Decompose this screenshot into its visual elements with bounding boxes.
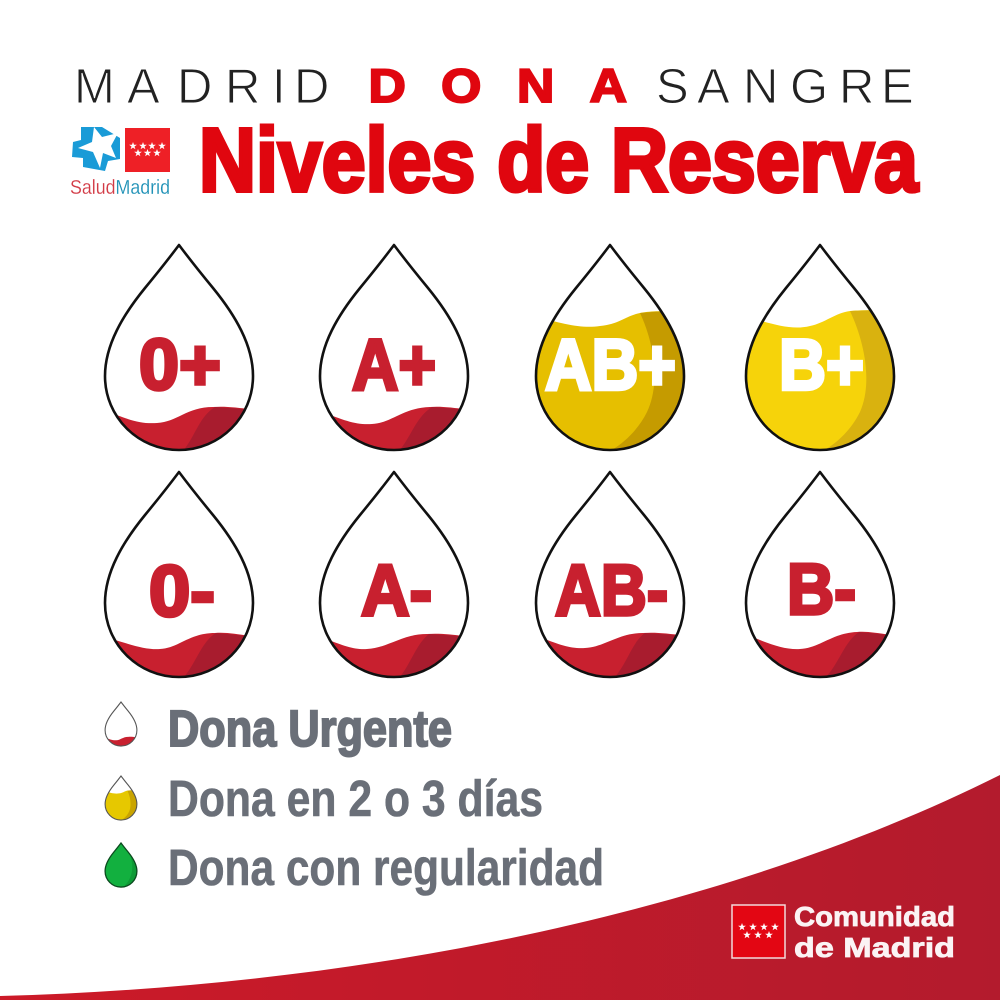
legend label: Dona con regularidad: Dona con regularidad: [168, 839, 604, 896]
drop: A- urgent: A-: [361, 551, 432, 631]
title: Madrid Dona Sangre: MADRID: [74, 60, 329, 114]
red swoosh footer: [0, 775, 1000, 1000]
drop: O- urgent: 0-: [149, 552, 215, 632]
icon: red flag with stars: [125, 128, 170, 172]
logo: Comunidad de Madrid: [732, 901, 955, 963]
icon: flag with seven stars: [732, 905, 785, 958]
drop: AB- urgent: AB-: [555, 551, 668, 631]
icon: blue cross with star: [72, 127, 120, 171]
title: Madrid Dona Sangre: SANGRE: [656, 60, 914, 114]
drop: O+ urgent: [99, 245, 259, 455]
drop: AB- urgent: [530, 472, 690, 682]
wordmark: de Madrid: [794, 932, 955, 963]
title: Madrid Dona Sangre: [74, 60, 914, 114]
logo wordmark: SaludMadrid: [70, 177, 170, 199]
legend icon: red drop: [104, 702, 138, 747]
legend label: Dona en 2 o 3 dias: Dona en 2 o 3 días: [168, 770, 543, 827]
drop: AB+ medium: [530, 245, 690, 455]
legend icon: yellow drop: [104, 776, 138, 821]
wordmark: Comunidad: [794, 901, 955, 932]
legend label: Dona Urgente: Dona Urgente: [168, 700, 452, 757]
wordmark: [794, 901, 955, 963]
drop: O+ urgent: 0+: [139, 326, 221, 406]
drop: A- urgent: [314, 472, 474, 682]
logo: SaludMadrid: [70, 127, 170, 199]
drop: AB+ medium: AB+: [545, 326, 676, 406]
heading: Niveles de Reserva: Niveles de Reserva: [199, 111, 919, 211]
drop: B- urgent: [740, 472, 900, 682]
legend icon: green drop: [105, 843, 138, 888]
drop: A+ urgent: [314, 245, 474, 455]
drop: B+ medium: [740, 245, 900, 455]
drop: A+ urgent: A+: [352, 326, 436, 406]
drop: B+ medium: B+: [779, 326, 864, 406]
title: Madrid Dona Sangre: DONA: [369, 60, 627, 112]
legend: [104, 700, 604, 896]
drop: B- urgent: B-: [787, 550, 856, 630]
drop: O- urgent: [99, 472, 259, 682]
